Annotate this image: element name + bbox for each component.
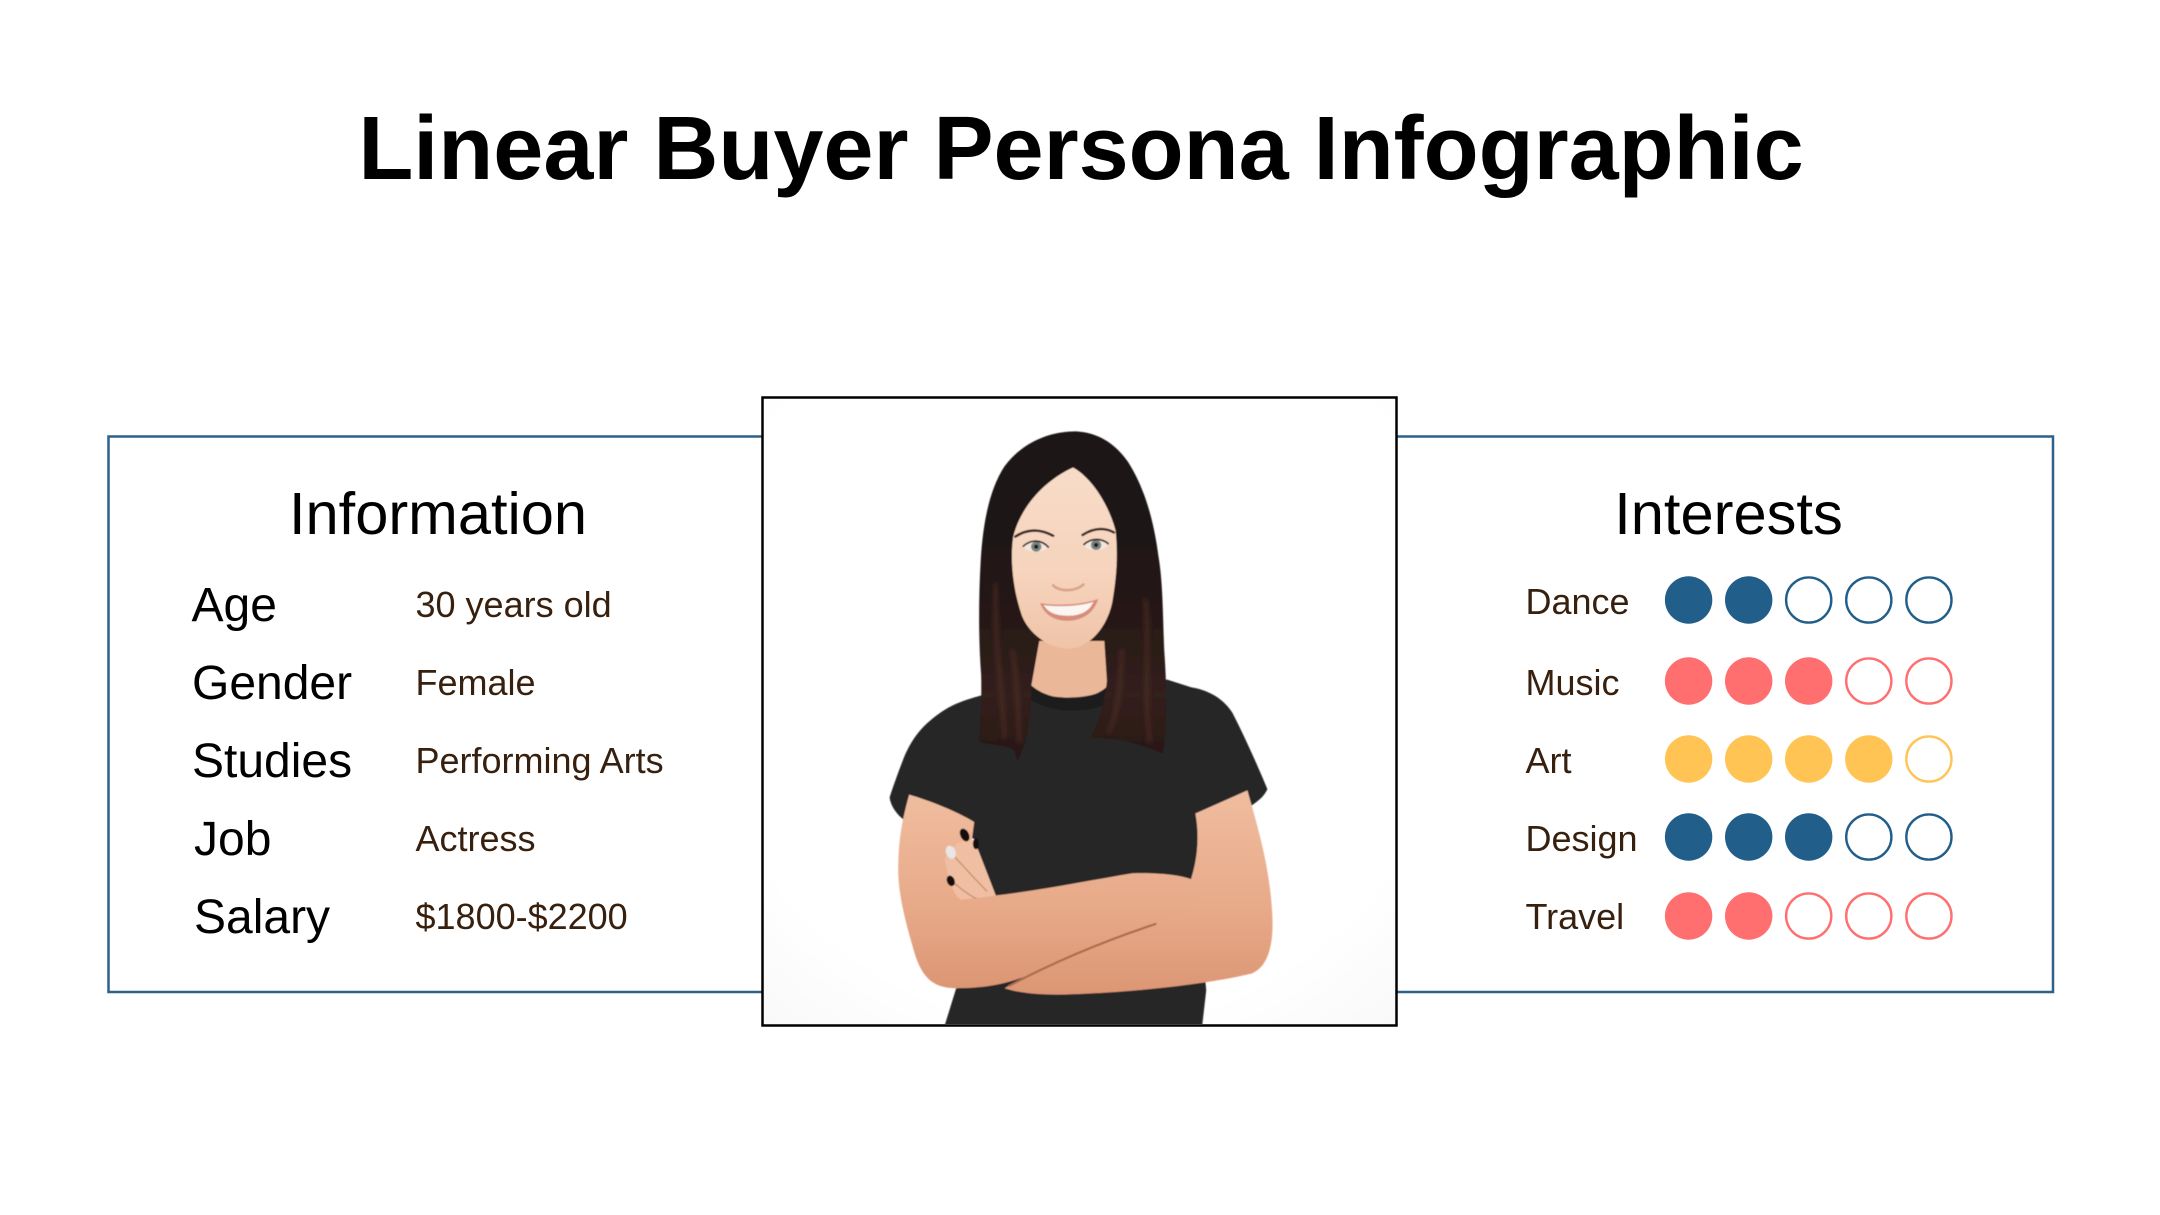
eyebrows xyxy=(1015,529,1114,537)
row: gender: Female xyxy=(416,662,536,703)
hair xyxy=(979,431,1166,761)
row: salary xyxy=(194,891,628,944)
panel: information xyxy=(192,480,664,944)
heading: interests: Interests xyxy=(1614,480,1843,547)
row: art rating 4 of 5 xyxy=(1526,735,1952,783)
row: studies: Studies xyxy=(192,735,352,788)
row: age xyxy=(192,579,612,632)
heading: information: Information xyxy=(289,480,587,547)
arm fold shadow xyxy=(1009,924,1156,986)
hair highlights xyxy=(996,582,1150,742)
row: dance rating 2 of 5 xyxy=(1526,576,1952,624)
nose xyxy=(1053,585,1083,590)
left-side arm xyxy=(898,795,1202,988)
row: studies: Performing Arts xyxy=(416,740,664,781)
row: age: 30 years old xyxy=(416,584,612,625)
neck xyxy=(1024,628,1117,698)
panel outline: information and interests xyxy=(108,436,2053,992)
row: music rating 3 of 5: Music xyxy=(1526,662,1620,703)
shirt collar xyxy=(1028,684,1113,711)
row: studies xyxy=(192,735,664,788)
panel: interests xyxy=(1526,480,1952,940)
row: music rating 3 of 5 xyxy=(1526,657,1952,705)
face xyxy=(1012,468,1117,649)
row: age: Age xyxy=(192,579,277,632)
row: salary: Salary xyxy=(194,891,330,944)
row: art rating 4 of 5: Art xyxy=(1526,740,1572,781)
row: travel rating 2 of 5: Travel xyxy=(1526,896,1624,937)
smile xyxy=(1040,599,1098,621)
row: dance rating 2 of 5: Dance xyxy=(1526,581,1630,622)
row: job xyxy=(194,813,536,866)
right-side arm xyxy=(1005,790,1273,995)
title: Linear Buyer Persona Infographic xyxy=(358,99,1804,199)
row: gender: Gender xyxy=(192,657,352,710)
row: travel rating 2 of 5 xyxy=(1526,892,1952,940)
row: job: Actress xyxy=(416,818,536,859)
fingers and nails xyxy=(944,827,996,900)
shirt torso and sleeves xyxy=(890,680,1267,1028)
row: design rating 3 of 5: Design xyxy=(1526,818,1638,859)
row: job: Job xyxy=(194,813,271,866)
eyes xyxy=(1023,540,1109,552)
row: salary: $1800-$2200 xyxy=(416,896,628,937)
row: design rating 3 of 5 xyxy=(1526,813,1952,861)
photo frame: portrait of smiling woman with crossed arms xyxy=(762,398,1396,1028)
row: gender xyxy=(192,657,536,710)
